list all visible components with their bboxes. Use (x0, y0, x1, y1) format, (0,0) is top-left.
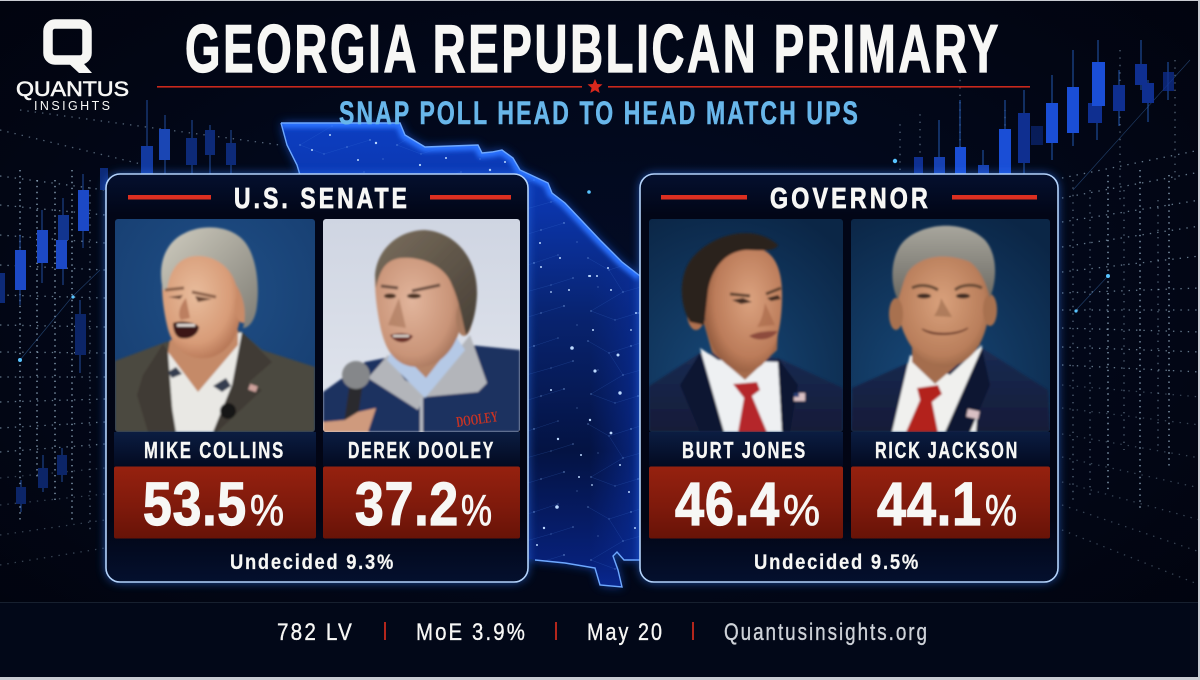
result: Collins 53.5%: 53.5 (143, 470, 247, 538)
result: Jones 46.4%: 46.4 (675, 470, 780, 538)
logo tagline: INSIGHTS (34, 99, 110, 113)
logo: Quantus Insights (16, 24, 129, 113)
result: Jones 46.4%: % (783, 486, 820, 535)
name: Derek Dooley (323, 432, 520, 466)
footer: date: May 20 (587, 619, 664, 646)
result: Dooley 37.2% (323, 466, 520, 538)
panel heading: Governor: GOVERNOR (770, 183, 931, 215)
name: Burt Jones: BURT JONES (682, 437, 807, 463)
candidate jacket logo: DOOLEY (455, 409, 499, 431)
photo: Burt Jones (649, 219, 843, 432)
undecided: Governor: Undecided 9.5% (754, 551, 920, 574)
photo: Derek Dooley (323, 219, 520, 432)
panel heading: U.S. Senate (128, 183, 511, 215)
result: Dooley 37.2%: % (461, 486, 492, 535)
footer: margin of error: MoE 3.9% (416, 619, 527, 646)
footer: sample size: 782 LV (277, 619, 354, 646)
undecided: Senate: Undecided 9.3% (230, 551, 395, 574)
candlestick chart: left (0, 100, 236, 512)
result: Jackson 44.1%: 44.1 (877, 470, 982, 538)
photo: Rick Jackson (851, 219, 1050, 432)
panel: U.S. Senate (106, 174, 528, 582)
panel heading: U.S. Senate: U.S. SENATE (234, 183, 410, 215)
name: Burt Jones (649, 432, 843, 466)
result: Dooley 37.2%: 37.2 (355, 470, 459, 538)
name: Mike Collins: MIKE COLLINS (144, 437, 285, 463)
name: Rick Jackson (851, 432, 1050, 466)
name: Rick Jackson: RICK JACKSON (875, 437, 1019, 463)
result: Collins 53.5%: % (250, 486, 284, 535)
panel: Governor (640, 174, 1058, 582)
result: Collins 53.5% (114, 466, 316, 538)
footer bar (0, 602, 1200, 677)
panel heading: Governor (661, 183, 1037, 215)
result: Jackson 44.1%: % (985, 486, 1017, 535)
photo: Mike Collins (115, 219, 315, 432)
logo wordmark: QUANTUS (16, 78, 129, 101)
name: Derek Dooley: DEREK DOOLEY (348, 437, 495, 463)
candlestick chart: right (914, 40, 1174, 174)
footer: website: Quantusinsights.org (724, 619, 929, 646)
result: Jackson 44.1% (851, 466, 1050, 538)
Georgia map silhouette (270, 115, 650, 595)
result: Jones 46.4% (649, 466, 843, 538)
subtitle: SNAP POLL HEAD TO HEAD MATCH UPS (339, 95, 860, 131)
title divider with star (157, 79, 1030, 93)
name: Mike Collins (114, 432, 316, 466)
icon: Q mark (48, 24, 92, 73)
